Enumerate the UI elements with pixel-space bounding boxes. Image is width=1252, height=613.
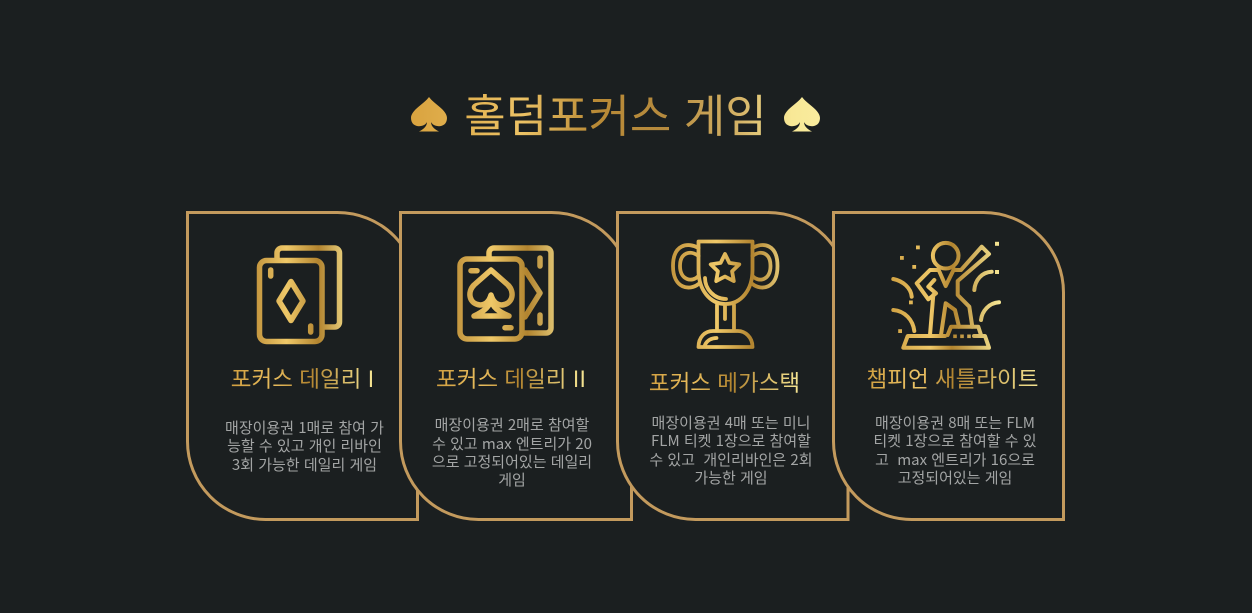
panel: 포커스 데일리 II bbox=[400, 212, 632, 520]
heading: 챔피언 새틀라이트 bbox=[867, 362, 1038, 394]
description: 수 있고 개인리바인은 2회 bbox=[649, 449, 813, 470]
panel: 포커스 메가스택 bbox=[618, 212, 848, 520]
panel: 챔피언 새틀라이트 bbox=[834, 212, 1064, 520]
description: 가능한 게임 bbox=[694, 467, 768, 488]
icon: diamond playing cards bbox=[260, 248, 340, 342]
icon: left spade bbox=[411, 97, 447, 132]
heading: 포커스 데일리 I bbox=[231, 362, 374, 394]
description: 고정되어있는 게임 bbox=[898, 467, 1012, 488]
description bbox=[873, 412, 1037, 488]
description: 매장이용권 1매로 참여 가 bbox=[225, 417, 384, 438]
icon: trophy bbox=[673, 242, 778, 347]
description: 으로 고정되어있는 데일리 bbox=[432, 451, 592, 472]
description bbox=[649, 412, 813, 488]
description: 매장이용권 2매로 참여할 bbox=[435, 414, 590, 435]
icon: champion statue bbox=[893, 243, 999, 348]
description: 고 max 엔트리가 16으로 bbox=[875, 449, 1035, 470]
description: 3회 가능한 데일리 게임 bbox=[232, 454, 377, 475]
panel outline bbox=[400, 212, 632, 520]
icon: right spade bbox=[784, 97, 820, 132]
description bbox=[225, 417, 384, 475]
heading: 포커스 데일리 II bbox=[436, 362, 586, 394]
description: FLM 티켓 1장으로 참여할 bbox=[651, 430, 811, 451]
heading: 포커스 메가스택 bbox=[649, 366, 800, 398]
icon: spade playing cards bbox=[460, 248, 551, 339]
title bbox=[411, 80, 820, 145]
panel outline bbox=[834, 212, 1064, 520]
description: 티켓 1장으로 참여할 수 있 bbox=[873, 430, 1037, 451]
title text: 홀덤포커스 게임 bbox=[464, 80, 767, 145]
description bbox=[432, 414, 592, 490]
description: 능할 수 있고 개인 리바인 bbox=[227, 435, 382, 456]
description: 게임 bbox=[498, 469, 526, 490]
panel: 포커스 데일리 I bbox=[188, 212, 418, 520]
description: 매장이용권 4매 또는 미니 bbox=[652, 412, 810, 433]
panel outline bbox=[188, 212, 418, 520]
confetti bbox=[898, 242, 999, 338]
panel outline bbox=[618, 212, 848, 520]
description: 수 있고 max 엔트리가 20 bbox=[432, 433, 592, 454]
description: 매장이용권 8매 또는 FLM bbox=[875, 412, 1035, 433]
